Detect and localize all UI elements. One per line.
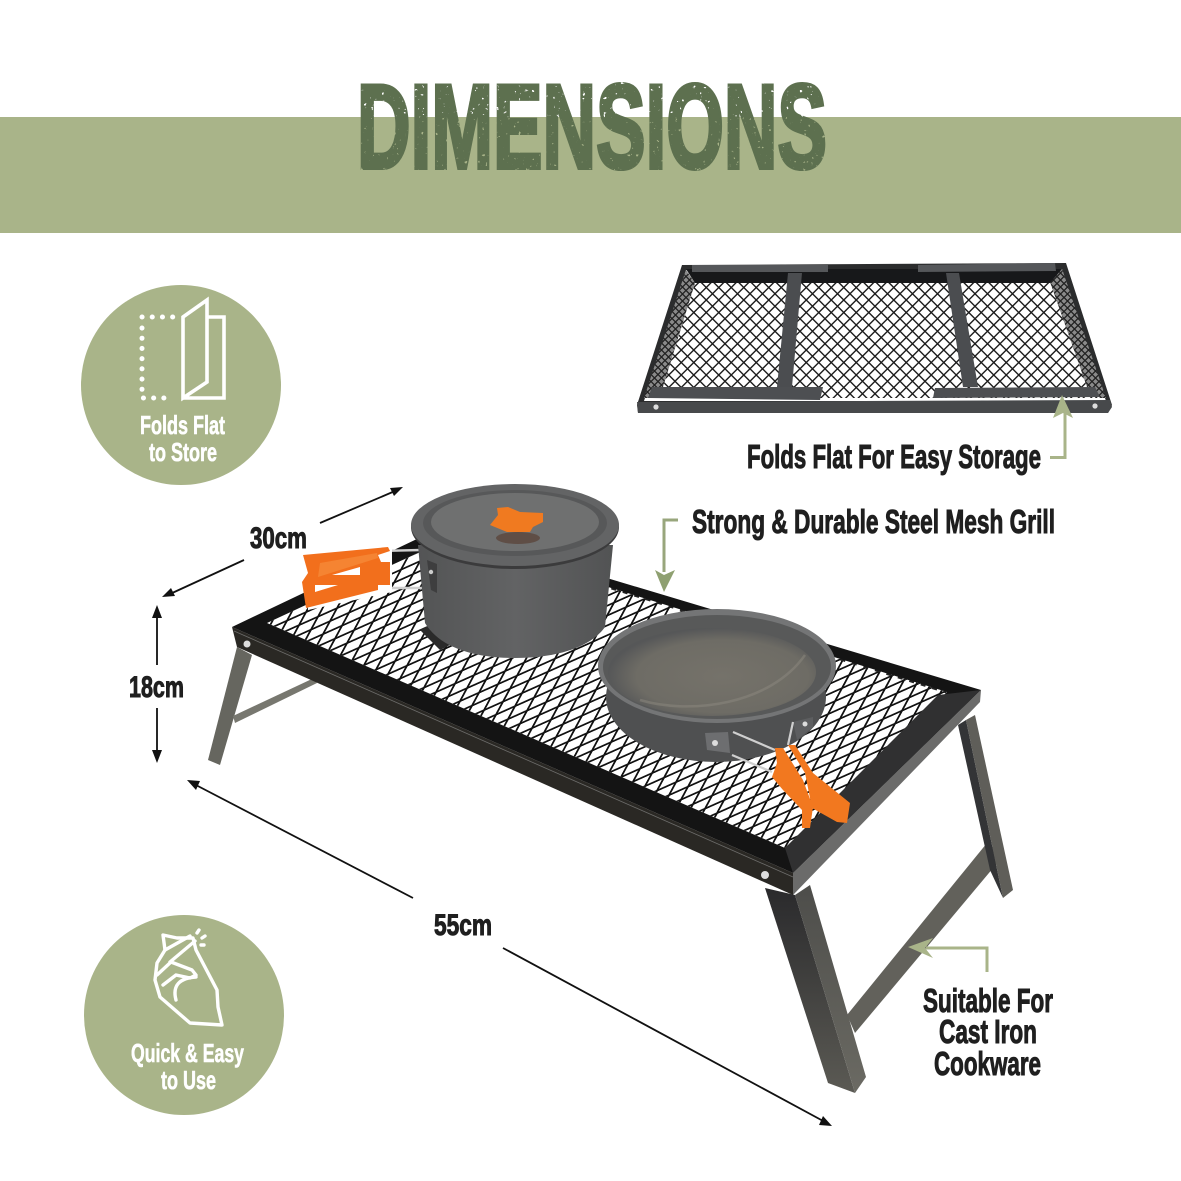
arrow: mesh grill callout: [655, 520, 678, 592]
text: suitable for cast iron cookware: Cookware: [934, 1045, 1041, 1082]
cooking pot: [302, 484, 619, 658]
icon: folding panel: [142, 300, 224, 398]
arrow: folds flat callout: [1050, 395, 1073, 458]
text: badge label: to Use: [161, 1065, 216, 1095]
dimension: 55cm: 55cm: [434, 909, 492, 942]
arrow: cookware callout: [908, 938, 987, 972]
text: badge label: [140, 410, 225, 467]
dimension: 55cm: [187, 780, 832, 1126]
photo: grill with pot and pan: [208, 484, 1013, 1093]
badge: folds flat to store: [81, 285, 281, 485]
text: suitable for cast iron cookware: Cast Iron: [939, 1013, 1037, 1050]
frying pan: [598, 609, 850, 828]
photo: folded flat grill: [637, 263, 1112, 413]
text: badge label: [131, 1038, 244, 1095]
dimension: 18cm: [129, 605, 184, 763]
pot handle: [302, 545, 422, 610]
text: folds flat for easy storage: Folds Flat For Easy Storage: [747, 438, 1041, 475]
text: badge label: to Store: [149, 437, 217, 467]
back legs and braces: [208, 647, 1013, 1033]
steel mesh: [267, 538, 947, 848]
dimension: 30cm: [162, 487, 403, 597]
header band: [0, 117, 1181, 233]
dimension: 30cm: 30cm: [250, 522, 307, 555]
front leg: [765, 885, 866, 1093]
text: suitable for cast iron cookware: [923, 982, 1053, 1082]
badge: quick and easy to use: [84, 915, 284, 1115]
text: badge label: Quick & Easy: [131, 1038, 244, 1068]
frame side faces: [232, 627, 793, 895]
text: suitable for cast iron cookware: Suitable For: [923, 982, 1053, 1019]
text: badge label: Folds Flat: [140, 410, 225, 440]
title: DIMENSIONS: [357, 60, 827, 194]
pan handle: [772, 745, 850, 828]
dimension: 18cm: 18cm: [129, 671, 184, 704]
frame top rails: [232, 528, 981, 873]
icon: finger snap hand: [155, 930, 222, 1025]
